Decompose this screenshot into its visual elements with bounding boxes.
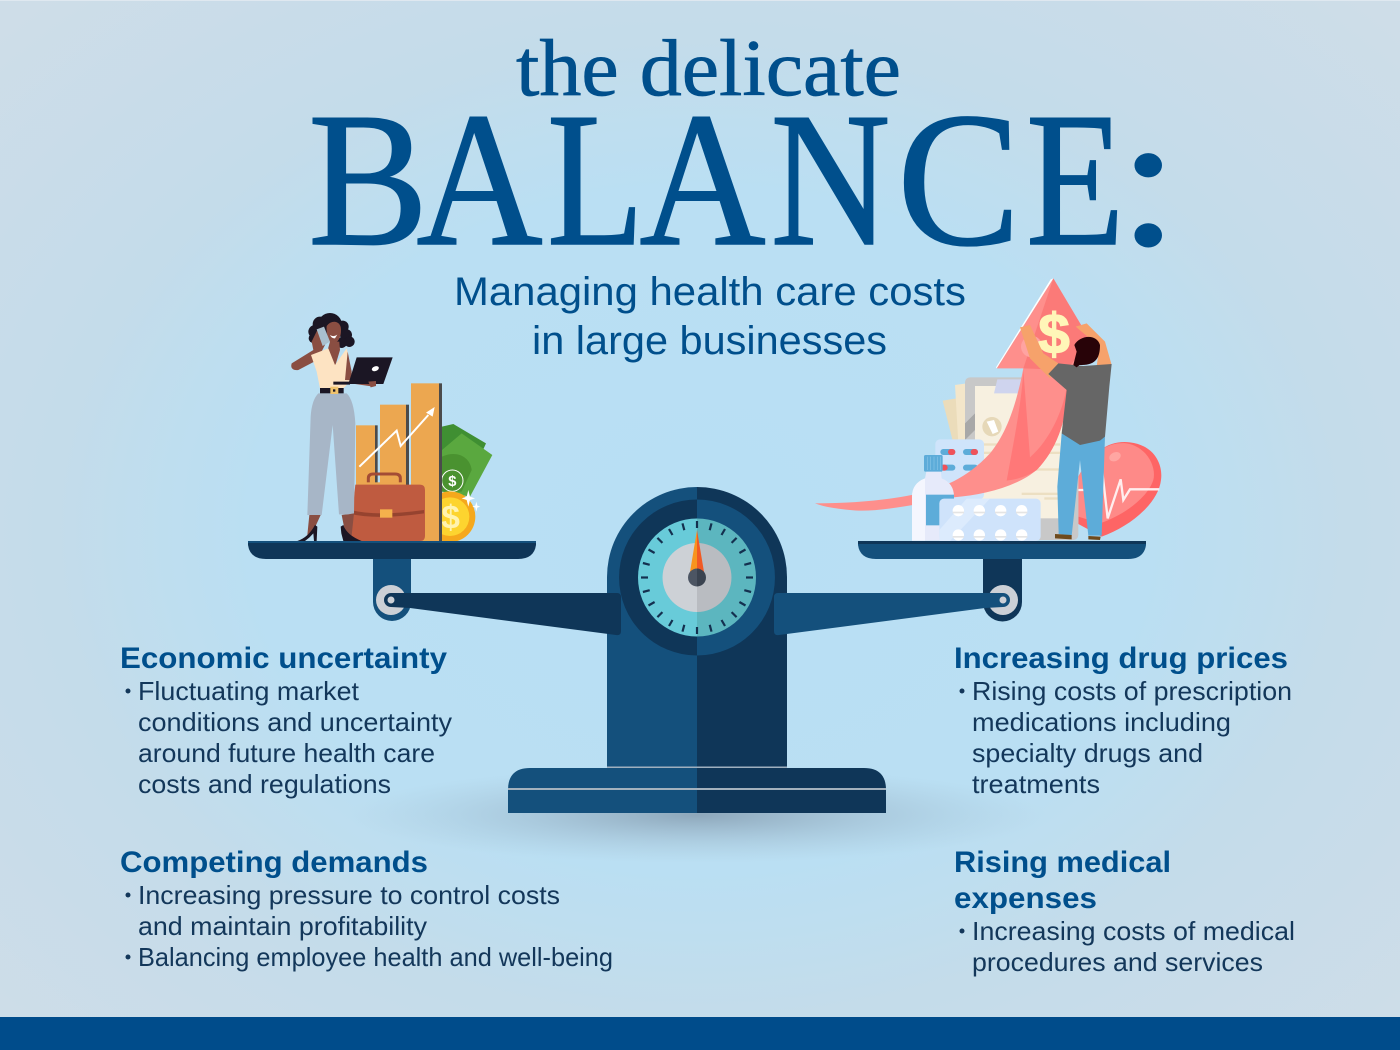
icon: banknotes: $	[448, 474, 456, 490]
title: A	[416, 73, 543, 286]
text block: economic uncertainty: Economic uncertainty	[120, 642, 447, 675]
icon: briefcase	[350, 474, 425, 541]
text block: competing demands: Increasing pressure to control costs	[138, 880, 560, 910]
illustration: medical costs and rising arrow	[815, 278, 1161, 541]
title: C	[897, 73, 1021, 286]
icon: rising arrow with dollar sign	[815, 278, 1090, 511]
text block: increasing drug prices	[954, 642, 1292, 799]
icon: heart with pulse	[1078, 442, 1161, 537]
title: L	[547, 73, 644, 286]
text block: increasing drug prices: Increasing drug prices	[954, 642, 1288, 675]
icon: banknotes	[442, 424, 492, 497]
text block: competing demands: Competing demands	[120, 846, 428, 879]
text block: rising medical expenses: Rising medical	[954, 846, 1171, 879]
hair	[308, 313, 355, 348]
text block: increasing drug prices: specialty drugs and	[972, 738, 1203, 768]
bottom bar	[0, 1017, 1400, 1050]
icon: tablet blister pack	[939, 499, 1041, 541]
icon: gold coin	[425, 490, 480, 542]
text block: rising medical expenses: expenses	[954, 882, 1097, 915]
subtitle	[454, 270, 966, 363]
text block: competing demands: and maintain profitability	[138, 911, 427, 941]
scale base	[508, 768, 886, 813]
title: A	[639, 73, 766, 286]
text block: economic uncertainty: conditions and uncertainty	[138, 707, 452, 737]
figure: man lifting arrow	[1020, 323, 1112, 540]
text block: increasing drug prices: medications including	[972, 707, 1231, 737]
text block: rising medical expenses	[954, 846, 1295, 977]
left arm joint	[373, 559, 621, 635]
subtitle: in large businesses	[532, 319, 887, 363]
text block: competing demands: Balancing employee health and well-being	[138, 942, 613, 972]
document clipboard	[943, 377, 1078, 540]
text block: increasing drug prices: treatments	[972, 769, 1100, 799]
icon: rising arrow with dollar sign: $	[1038, 303, 1070, 366]
scale column	[607, 487, 787, 768]
text block: economic uncertainty: costs and regulations	[138, 769, 391, 799]
text block: increasing drug prices: Rising costs of prescription	[972, 676, 1292, 706]
legs and shoes	[297, 513, 362, 541]
title: B	[308, 73, 428, 286]
title	[308, 25, 1179, 286]
text block: economic uncertainty: around future health care	[138, 738, 435, 768]
illustration: businesswoman, bar chart, money	[291, 313, 492, 542]
bar chart	[356, 383, 442, 541]
icon: medicine bottle	[912, 455, 954, 541]
floor shadow	[347, 767, 1047, 863]
text block: rising medical expenses: Increasing costs of medical	[972, 916, 1295, 946]
right pan	[858, 541, 1146, 559]
subtitle: Managing health care costs	[454, 270, 966, 314]
text block: competing demands	[120, 846, 613, 972]
title: the delicate	[516, 25, 901, 113]
title: E	[1026, 73, 1124, 286]
left pan	[248, 541, 536, 559]
title: N	[770, 73, 890, 286]
icon: capsule blister pack	[935, 439, 984, 499]
balance scale	[248, 487, 1146, 813]
title: :	[1118, 73, 1179, 286]
icon: gold coin: $	[441, 499, 460, 536]
text block: economic uncertainty: Fluctuating market	[138, 676, 360, 706]
right arm joint	[774, 559, 1022, 635]
text block: economic uncertainty	[120, 642, 452, 799]
gauge dial	[619, 500, 775, 656]
text block: rising medical expenses: procedures and services	[972, 947, 1263, 977]
figure: woman on phone	[291, 313, 393, 541]
